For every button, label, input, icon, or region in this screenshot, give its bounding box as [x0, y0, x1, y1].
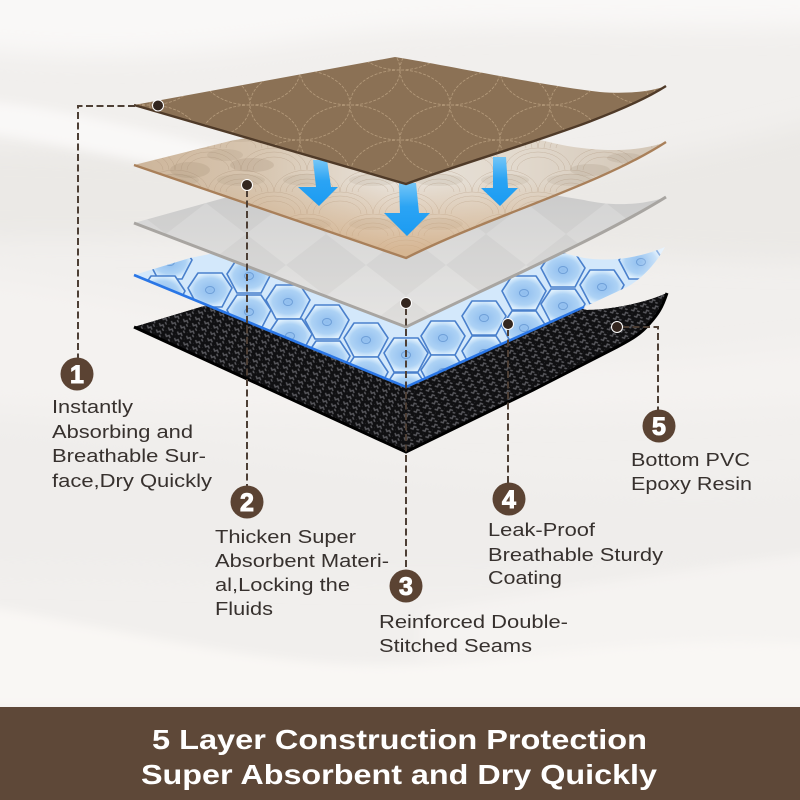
callout 1: Instantly: [52, 397, 133, 417]
footer banner: [0, 707, 800, 800]
callout 4: Coating: [488, 568, 562, 588]
layer 3: grey diamond stitched seam layer: [134, 196, 667, 329]
callout 2: Thicken Super: [215, 527, 356, 547]
icon: centre blue arrow: [384, 183, 430, 236]
callout 2: al,Locking the: [215, 575, 350, 595]
callout 3: 3: [399, 573, 413, 601]
layer 2: tan absorbent quilted layer: [134, 138, 667, 260]
callout 1: face,Dry Quickly: [52, 471, 212, 491]
callout 2: [215, 180, 389, 619]
layer 5: black PVC base: [133, 292, 668, 454]
callout 3: Reinforced Double-: [379, 612, 568, 632]
callout 5: 5: [652, 413, 666, 441]
callout 1: [52, 100, 212, 491]
callout 1: Breathable Sur-: [52, 446, 206, 466]
callout 3: Stitched Seams: [379, 636, 532, 656]
callout 2: Absorbent Materi-: [215, 551, 389, 571]
icon: left blue arrow: [298, 160, 338, 206]
callout 4: Breathable Sturdy: [488, 545, 663, 565]
callout 1: 1: [70, 361, 84, 389]
callout 4: Leak-Proof: [488, 520, 596, 540]
callout 5: Epoxy Resin: [631, 474, 752, 494]
callout 2: Fluids: [215, 599, 273, 619]
layer 1: brown quilted top surface: [130, 55, 670, 185]
footer banner: 5 Layer Construction Protection: [152, 724, 647, 755]
callout 4: [488, 318, 663, 588]
callout 1: Absorbing and: [52, 422, 193, 442]
icon: right blue arrow: [481, 157, 518, 206]
callout 4: 4: [502, 486, 516, 514]
callout 5: Bottom PVC: [631, 450, 750, 470]
layer 4: blue hexagon coating: [134, 247, 665, 388]
footer banner: Super Absorbent and Dry Quickly: [141, 759, 657, 790]
callout 2: 2: [240, 489, 254, 517]
callout 3: [379, 298, 568, 656]
callout 5: [612, 322, 752, 494]
